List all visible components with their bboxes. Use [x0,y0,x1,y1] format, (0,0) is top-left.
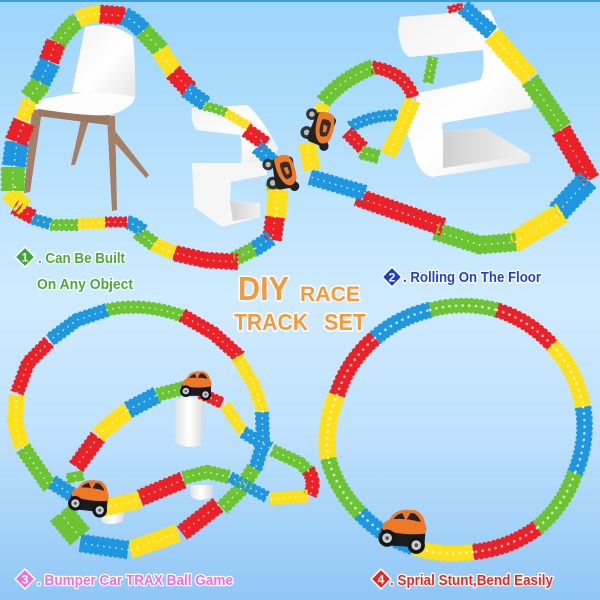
track 3 [15,307,313,550]
icon: race car 4 [67,478,110,518]
caption 2: 2 [389,270,396,284]
icon: race car 3 [180,371,212,400]
panel: track over chair [8,13,300,262]
panel: spiral loop [327,306,585,555]
track 1 [8,13,278,262]
caption 1: 1 [22,250,29,264]
panel: track rolling on floor [295,6,590,245]
icon: white S-shaped stand [192,105,278,227]
icon: white chair [24,25,149,211]
caption 3: 3 [22,572,29,586]
caption 4: 4 [378,572,385,586]
caption 2 [382,267,541,287]
caption 4: . Sprial Stunt,Bend Easily [390,573,553,589]
title: TRACK [234,309,308,335]
title: SET [324,309,366,335]
panel: bumper car game [15,307,313,550]
icon: white supports [100,397,213,524]
title [234,270,366,335]
track 2 [307,6,590,245]
track 4 [327,306,585,554]
icon: race car 1 [261,153,300,195]
caption 1 [15,247,133,293]
icon: white S-shaped stand 2 [398,10,533,177]
caption 3 [15,569,233,589]
icon: race car 2 [295,105,340,152]
title: DIY [238,270,289,307]
caption 4 [371,569,553,589]
caption 3: . Bumper Car TRAX Ball Game [37,573,233,589]
caption 1: On Any Object [37,277,133,293]
icon: race car 5 [377,508,428,555]
title: RACE [300,283,360,306]
caption 1: . Can Be Built [38,251,125,267]
caption 2: . Rolling On The Floor [403,270,541,286]
